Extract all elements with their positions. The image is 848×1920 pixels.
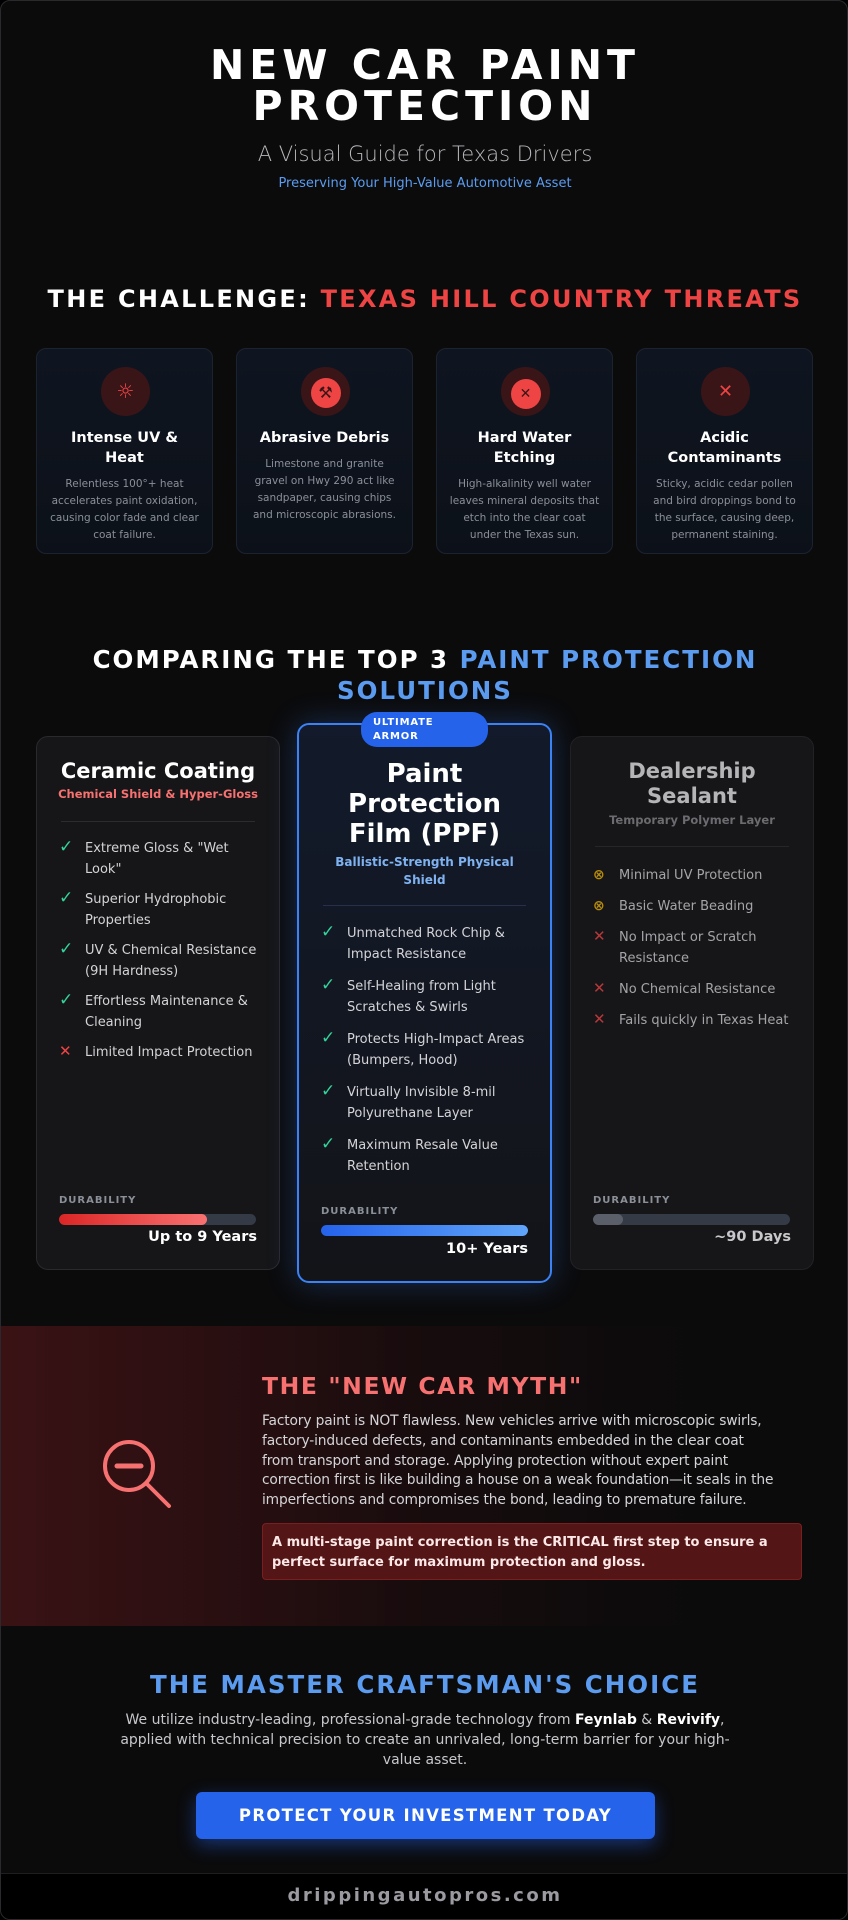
panel: PPF (297, 723, 552, 1283)
icon: sun: ☼ (117, 379, 134, 403)
ppf features: Unmatched Rock Chip & Impact Resistance (347, 926, 505, 962)
sealant features: Fails quickly in Texas Heat (619, 1013, 788, 1028)
callout (262, 1523, 802, 1580)
ppf features: ✓ (321, 1081, 335, 1101)
icon: x: ✕ (718, 381, 733, 402)
card: acidic: Acidic (700, 430, 749, 446)
ppf features: Protects High-Impact Areas (Bumpers, Hood) (347, 1032, 524, 1068)
title: PROTECTION (253, 82, 597, 130)
card: UV heat: Intense UV & (71, 430, 178, 446)
badge: ultimate armor: ARMOR (373, 731, 419, 742)
subtitle: A Visual Guide for Texas Drivers (258, 142, 592, 166)
panel: threat cards (36, 348, 813, 554)
sealant features: ⊗ (593, 867, 605, 883)
ceramic durability: DURABILITY (59, 1195, 136, 1206)
ppf title: Paint (387, 759, 462, 789)
ceramic features (59, 837, 256, 1060)
ppf features: ✓ (321, 1028, 335, 1048)
card: UV heat: Heat (105, 450, 144, 466)
card: acidic: Contaminants (668, 450, 781, 466)
title: NEW CAR PAINT (210, 41, 640, 89)
sealant features: No Chemical Resistance (619, 982, 775, 997)
card: hard water: Hard Water (478, 430, 571, 446)
card: UV heat: Relentless 100°+ heat accelerates paint oxidation, causing color fade and clear coat failure. (50, 478, 199, 541)
sealant features (593, 867, 788, 1028)
button: cta: PROTECT YOUR INVESTMENT TODAY (239, 1806, 612, 1825)
panel: dealership sealant: ~90 Days (714, 1229, 791, 1245)
myth paragraph: Factory paint is NOT flawless. New vehicles arrive with microscopic swirls, factory-induced defects, and contaminants embedded in the clear coat (262, 1413, 762, 1449)
ceramic features: UV & Chemical Resistance (9H Hardness) (85, 943, 256, 979)
callout: A multi-stage paint correction is the CRITICAL first step to ensure a perfect surface for maximum protection and gloss. (272, 1535, 768, 1570)
panel: dealership sealant: Temporary Polymer Layer (609, 813, 775, 827)
card: acidic (636, 348, 813, 554)
ppf features (321, 922, 524, 1174)
panel: ceramic coating: Chemical Shield & Hyper-Gloss (58, 787, 258, 801)
sealant durability: DURABILITY (593, 1195, 670, 1206)
badge: ultimate armor: ULTIMATE (373, 717, 433, 728)
ppf features: ✓ (321, 922, 335, 942)
heading: comparing: SOLUTIONS (337, 676, 513, 705)
icon: magnifier (103, 1440, 172, 1508)
ppf title (348, 759, 501, 849)
card: hard water: High-alkalinity well water leaves mineral deposits that etch into the clear coat under the Texas sun. (450, 478, 599, 541)
card: hard water (436, 348, 613, 554)
sealant title: Dealership (628, 759, 756, 783)
sealant features: Minimal UV Protection (619, 868, 762, 883)
panel: dealership sealant (570, 736, 814, 1270)
heading: craftsman: THE MASTER CRAFTSMAN'S CHOICE (150, 1670, 700, 1699)
sealant features: No Impact or Scratch Resistance (619, 930, 757, 966)
ceramic features: Effortless Maintenance & Cleaning (85, 994, 248, 1030)
card: debris: Abrasive Debris (260, 430, 389, 446)
panel: PPF: Ballistic-Strength Physical Shield (335, 855, 514, 887)
title (210, 41, 640, 130)
footer (1, 1873, 848, 1920)
ppf durability: DURABILITY (321, 1206, 398, 1217)
icon: tools (301, 367, 350, 416)
sealant title (628, 759, 756, 808)
ceramic features: Extreme Gloss & "Wet Look" (85, 841, 229, 877)
footer: drippingautopros.com (288, 1885, 562, 1906)
icon: tools: ⚒ (318, 383, 333, 402)
panel: new car myth (1, 1326, 848, 1626)
sealant title: Sealant (647, 784, 737, 808)
icon: sun (101, 367, 150, 416)
ppf features: ✓ (321, 975, 335, 995)
button: cta (196, 1792, 655, 1839)
ceramic features: Superior Hydrophobic Properties (85, 892, 226, 928)
panel: ceramic coating (36, 736, 280, 1270)
card: UV heat (36, 348, 213, 554)
ppf features: Self-Healing from Light Scratches & Swirls (347, 979, 496, 1015)
heading: challenge: THE CHALLENGE: TEXAS HILL COUNTRY THREATS (48, 285, 802, 313)
sealant features: Basic Water Beading (619, 899, 753, 914)
ppf features: Virtually Invisible 8-mil Polyurethane Layer (347, 1085, 496, 1121)
heading: comparing: COMPARING THE TOP 3 PAINT PROTECTION (93, 645, 757, 674)
sealant features: ✕ (593, 1010, 606, 1028)
ceramic features: ✓ (59, 888, 73, 908)
ppf title: Film (PPF) (349, 819, 500, 849)
myth heading: THE "NEW CAR MYTH" (262, 1372, 583, 1400)
ppf title: Protection (348, 789, 501, 819)
ceramic features: ✓ (59, 990, 73, 1010)
card: debris: Limestone and granite gravel on Hwy 290 act like sandpaper, causing chips and microscopic abrasions. (253, 458, 396, 521)
ppf features: Maximum Resale Value Retention (347, 1138, 498, 1174)
card: debris (236, 348, 413, 554)
ppf features: ✓ (321, 1134, 335, 1154)
sealant features: ✕ (593, 927, 606, 945)
myth paragraph: correction first is like building a house on a weak foundation—it seals in the imperfections and compromises the bond, leading to premature failure. (262, 1472, 773, 1508)
ceramic features: ✓ (59, 939, 73, 959)
ceramic features: ✕ (59, 1042, 72, 1060)
panel: PPF: 10+ Years (446, 1241, 528, 1257)
sealant features: ⊗ (593, 898, 605, 914)
ceramic title: Ceramic Coating (61, 759, 255, 783)
myth paragraph: from transport and storage. Applying protection without expert paint (262, 1453, 728, 1469)
icon: x circle: ✕ (520, 386, 531, 402)
badge: ultimate armor (361, 712, 488, 747)
icon: x circle (501, 367, 550, 416)
ceramic features: Limited Impact Protection (85, 1045, 252, 1060)
panel: ceramic coating: Up to 9 Years (148, 1229, 257, 1245)
myth paragraph (262, 1413, 773, 1508)
sealant features: ✕ (593, 979, 606, 997)
tagline: Preserving Your High-Value Automotive Asset (278, 176, 572, 191)
icon: x (701, 367, 750, 416)
heading: comparing (93, 645, 757, 705)
card: hard water: Etching (494, 450, 555, 466)
ceramic features: ✓ (59, 837, 73, 857)
card: acidic: Sticky, acidic cedar pollen and bird droppings bond to the surface, causing deep, permanent staining. (653, 478, 796, 541)
craftsman paragraph: We utilize industry-leading, professional-grade technology from Feynlab & Revivify, applied with technical precision to create an unrivaled, long-term barrier for your high-value asset. (120, 1712, 730, 1768)
